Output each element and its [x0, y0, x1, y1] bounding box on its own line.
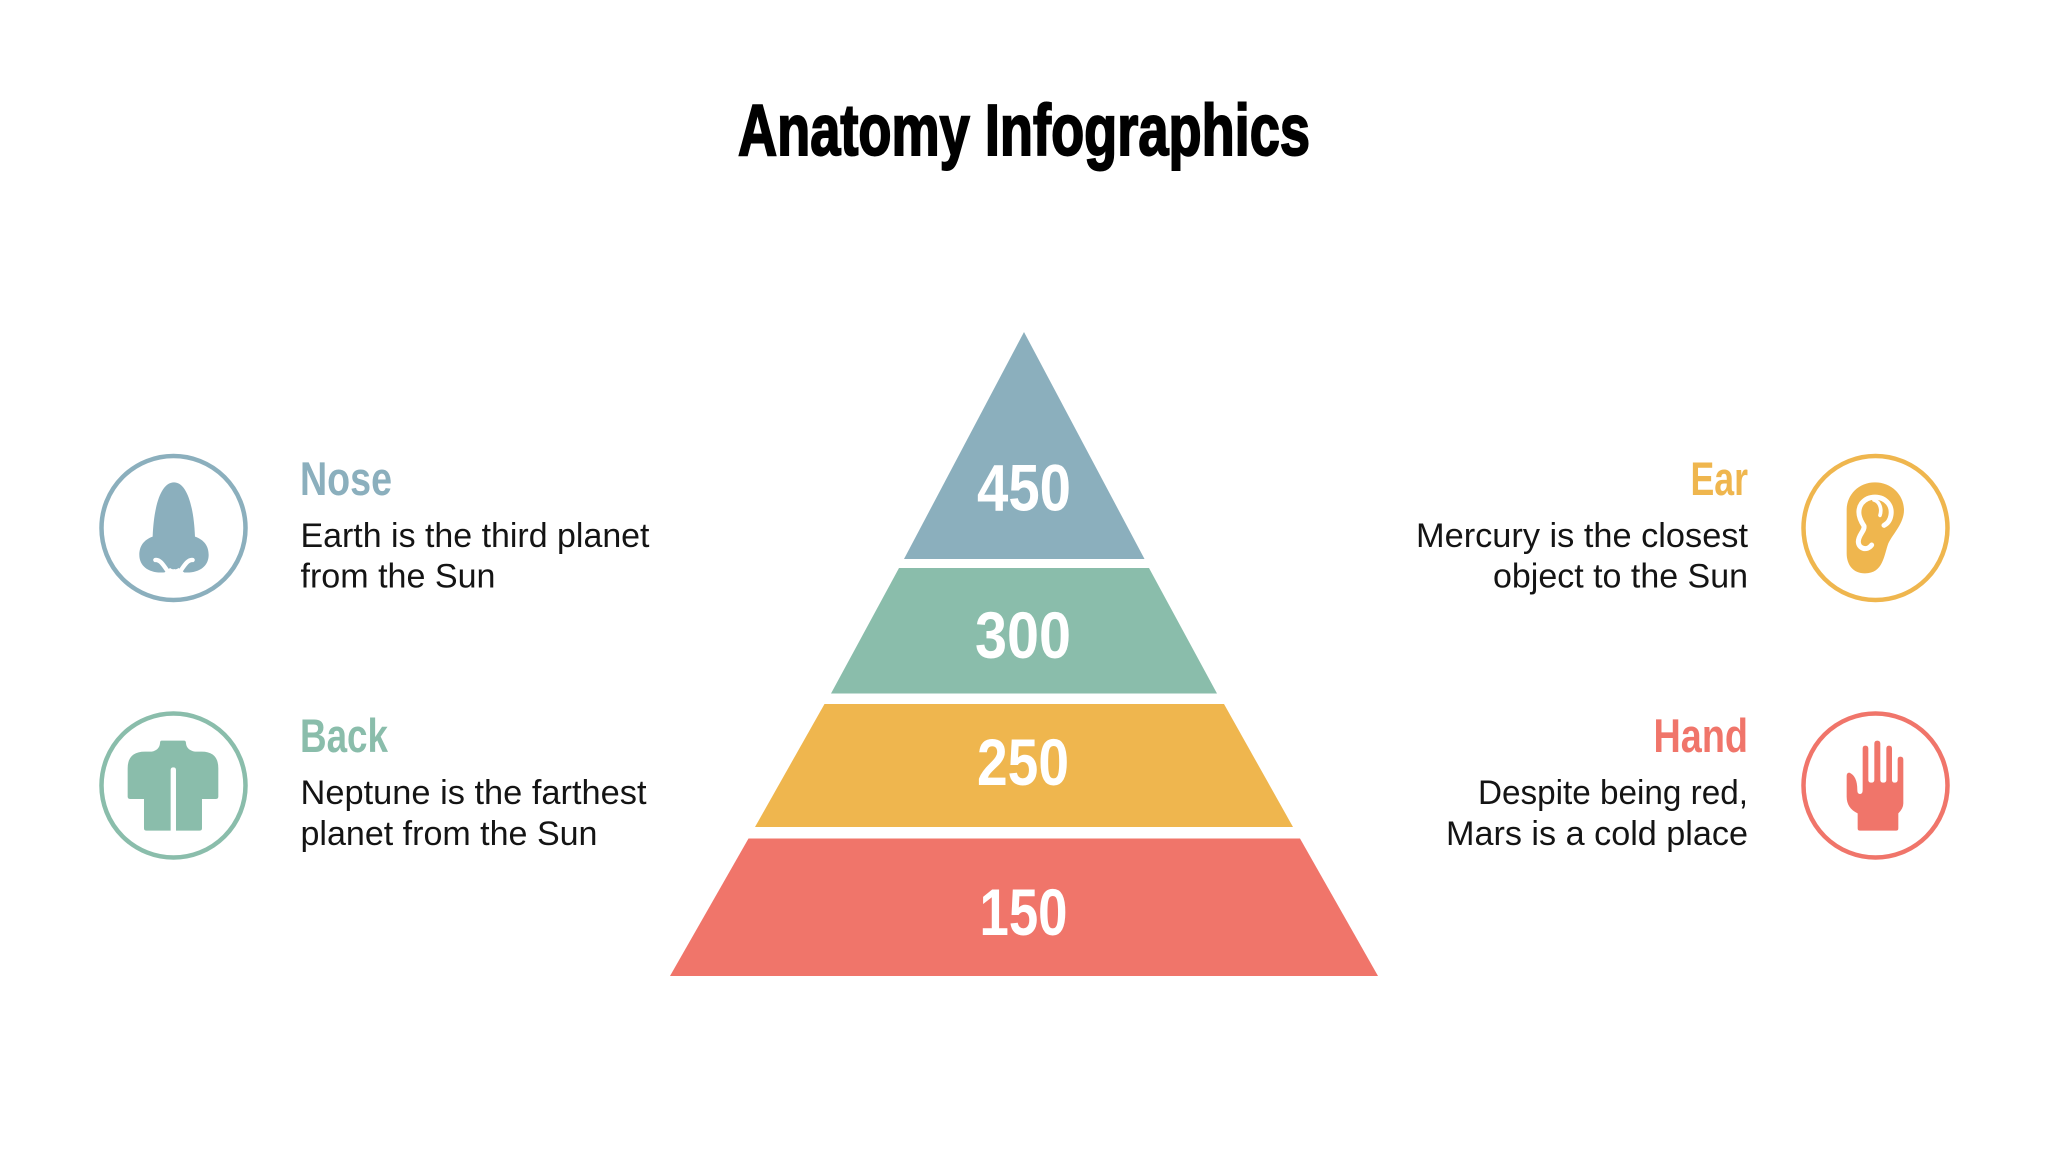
panel: hand [1446, 709, 1948, 858]
title: Anatomy Infographics [738, 91, 1310, 171]
description: Hand: Mars is a cold place [1446, 815, 1748, 853]
heading: Hand: Hand [1654, 709, 1748, 762]
description: Nose: from the Sun [300, 558, 496, 596]
description: Nose [300, 517, 650, 596]
heading: Back: Back [300, 709, 389, 762]
pyramid chart [670, 332, 1378, 976]
panel: ear [1416, 452, 1948, 600]
icon: hand [1804, 714, 1948, 858]
description: Back: planet from the Sun [300, 815, 598, 853]
icon: back [102, 714, 246, 858]
tier: 450 [904, 332, 1144, 559]
panel: nose [102, 452, 650, 600]
description: Ear: object to the Sun [1493, 558, 1748, 596]
description: Ear [1416, 517, 1749, 596]
panel: back [102, 709, 647, 858]
heading: Nose: Nose [300, 452, 392, 505]
heading: Ear: Ear [1690, 452, 1748, 505]
tier: 250: 250 [977, 725, 1069, 799]
description: Ear: Mercury is the closest [1416, 517, 1749, 555]
tier: 250 [755, 704, 1293, 827]
tier: 450: 450 [977, 450, 1071, 524]
description: Nose: Earth is the third planet [300, 517, 650, 555]
tier: 150: 150 [980, 875, 1068, 949]
description: Hand: Despite being red, [1478, 774, 1748, 812]
tier: 150 [670, 838, 1378, 976]
tier: 300 [831, 568, 1217, 694]
tier: 300: 300 [975, 598, 1071, 672]
icon: nose [102, 456, 246, 600]
icon: ear [1804, 456, 1948, 600]
description: Back [300, 774, 647, 853]
description: Back: Neptune is the farthest [300, 774, 647, 812]
description: Hand [1446, 774, 1748, 853]
